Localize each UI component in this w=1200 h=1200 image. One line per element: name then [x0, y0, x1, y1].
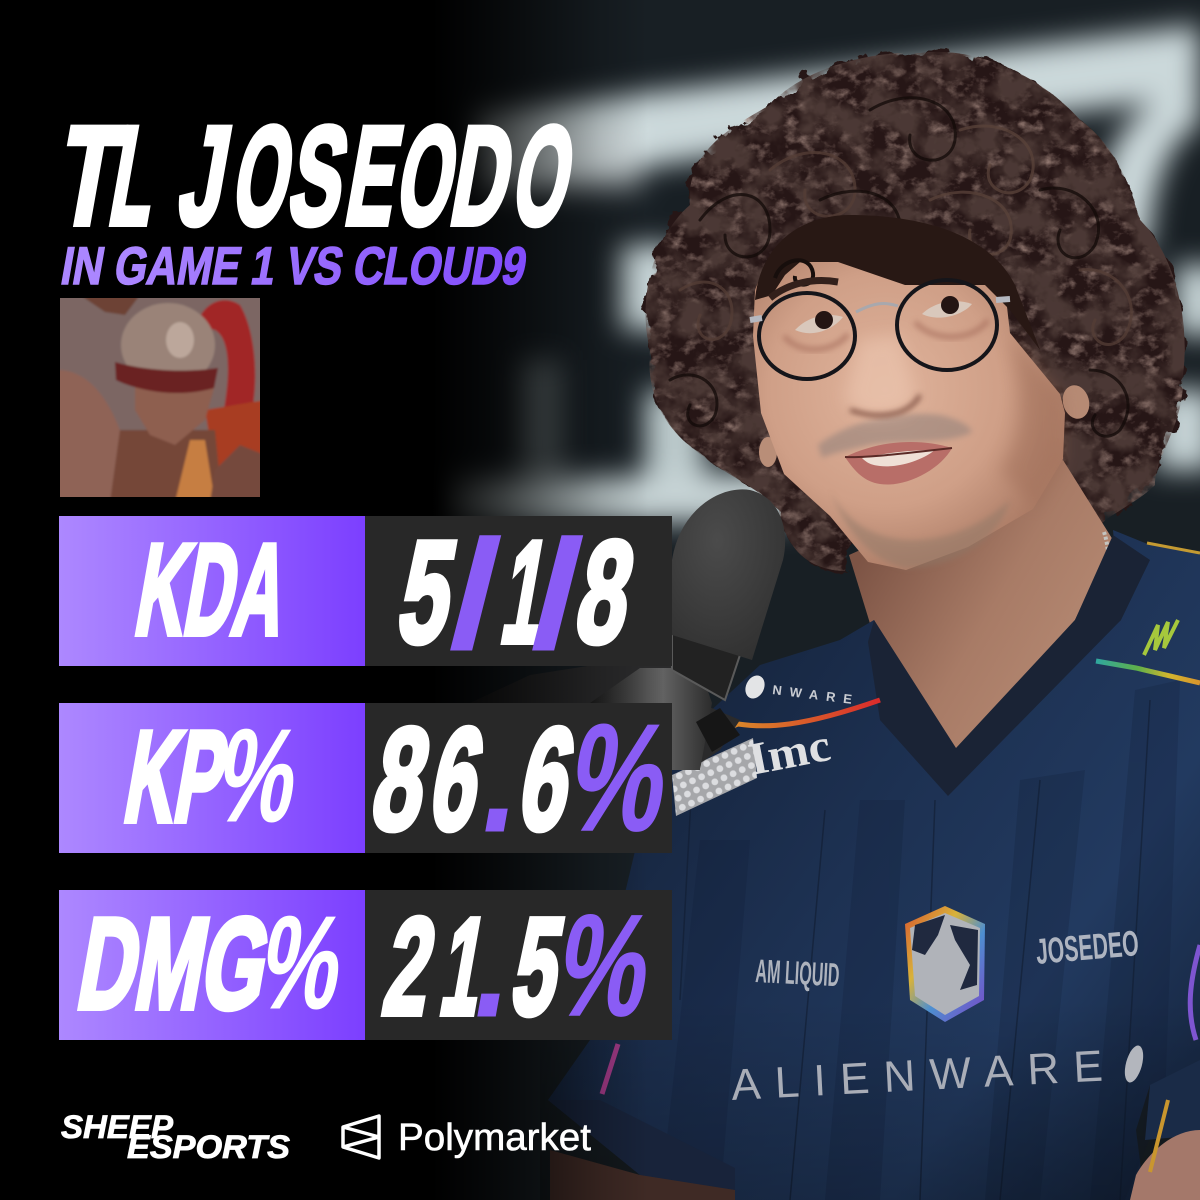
shoulder yellow trim — [1147, 543, 1200, 553]
value — [363, 693, 682, 863]
left eyebrow — [770, 281, 838, 298]
value: 6 — [510, 698, 586, 860]
value — [389, 511, 645, 677]
jersey collar — [868, 535, 1150, 796]
nose — [845, 335, 920, 417]
value: % — [548, 885, 664, 1046]
value: 5 — [389, 511, 467, 673]
glow — [205, 400, 260, 466]
title: T — [49, 97, 132, 254]
title: J — [170, 97, 241, 254]
jaw — [135, 385, 215, 445]
title: O — [224, 97, 305, 254]
honeycomb logo — [672, 738, 757, 816]
team liquid shield — [905, 906, 985, 1022]
logo: Sheep Esports — [61, 1109, 291, 1165]
logo: Sheep Esports: ESPORTS — [127, 1129, 291, 1165]
bald head — [120, 302, 216, 372]
jersey — [540, 530, 1200, 1200]
value: 1 — [493, 511, 559, 673]
right ear — [1059, 382, 1093, 422]
face — [753, 215, 1065, 570]
jersey: AM LIQUID — [755, 952, 840, 993]
value: 5 — [503, 890, 574, 1044]
sleeve trims — [1190, 945, 1200, 1040]
value panel — [365, 516, 672, 666]
subtitle: IN GAME 1 VS CLOUD9 — [57, 237, 531, 296]
boom arm — [470, 664, 740, 770]
label: % — [208, 703, 310, 850]
label panel — [59, 890, 365, 1040]
hand — [210, 444, 260, 497]
value: / — [450, 512, 501, 677]
imc logo: Imc — [744, 719, 834, 785]
value: / — [532, 512, 583, 677]
monster logo — [1144, 620, 1178, 655]
label: % — [251, 890, 355, 1037]
ponytail — [200, 299, 256, 408]
alienware text: ALIENWARE — [730, 1042, 1104, 1110]
title: O — [388, 97, 469, 254]
foam windscreen — [672, 489, 785, 660]
arm — [60, 370, 120, 497]
neck — [849, 460, 1113, 750]
photo: player at the desk — [446, 0, 1200, 1200]
value — [375, 885, 664, 1046]
label: DMG — [69, 891, 281, 1036]
value: . — [476, 721, 528, 855]
wordmark: Polymarket — [398, 1117, 591, 1159]
champion portrait: Lee Sin — [60, 298, 260, 497]
value: 8 — [363, 698, 441, 860]
logo: Sheep Esports: SHEEP — [61, 1109, 174, 1145]
mic ring — [672, 625, 745, 700]
moustache — [818, 414, 972, 458]
rock top — [84, 298, 138, 316]
title: D — [442, 97, 525, 254]
value: 1 — [432, 890, 497, 1044]
stat row: KP% — [59, 693, 682, 863]
shoulder rainbow trim left — [685, 700, 880, 755]
jersey seam lines — [680, 700, 1150, 1200]
value: % — [558, 693, 682, 863]
shoulder alienware text: NWARE — [772, 682, 853, 707]
blindfold — [115, 362, 218, 393]
value: . — [468, 906, 520, 1040]
label: KDA — [127, 517, 299, 662]
stubble on jaw — [830, 490, 1010, 568]
mic knob — [696, 708, 740, 752]
title: L — [101, 97, 170, 254]
right eye — [915, 296, 988, 337]
mouth — [845, 442, 952, 485]
left sleeve cuff — [548, 1100, 735, 1190]
hair fringe over forehead — [755, 215, 1040, 350]
cheek shadow right — [1000, 335, 1063, 508]
shoulder rainbow trim right — [1096, 661, 1200, 683]
back of hair — [630, 40, 1200, 580]
glasses — [750, 280, 1010, 379]
title: S — [280, 97, 359, 254]
alien head — [1121, 1044, 1147, 1084]
shoulder alien head — [742, 672, 768, 702]
title: E — [337, 97, 412, 254]
label panel — [59, 516, 365, 666]
value: 6 — [421, 698, 495, 860]
chest — [110, 430, 222, 502]
value panel — [365, 890, 672, 1040]
right sleeve cuff — [1145, 1060, 1200, 1140]
label panel — [59, 703, 365, 853]
right arm — [1130, 1130, 1200, 1200]
label: KP — [116, 704, 238, 849]
value: 2 — [375, 890, 446, 1044]
value: 8 — [567, 511, 645, 673]
logo: Polymarket — [343, 1116, 591, 1159]
necklace — [1104, 532, 1108, 582]
left eye — [784, 311, 848, 349]
stat row: DMG% — [59, 885, 672, 1046]
mic body — [590, 668, 712, 770]
microphone — [470, 489, 785, 770]
icon: Polymarket mark — [343, 1116, 379, 1158]
jersey vertical stripes — [660, 680, 1180, 1200]
title: O — [504, 97, 585, 254]
value panel — [365, 703, 672, 853]
blurred stage backdrop — [420, 0, 1200, 1200]
left ear — [759, 437, 777, 467]
left arm — [550, 1150, 735, 1200]
title — [49, 97, 585, 254]
stat row: KDA — [59, 511, 672, 677]
